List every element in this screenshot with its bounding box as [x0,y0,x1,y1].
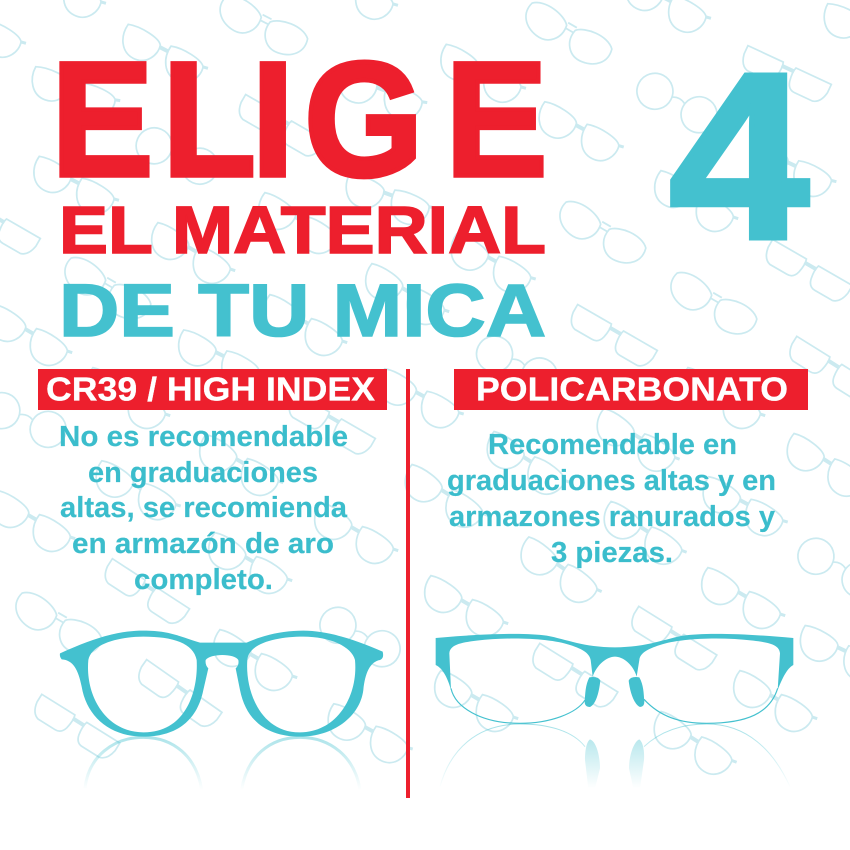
text block: Policarbonato description: armazones ranurados y [449,501,775,533]
step number 4: 4 [669,24,809,289]
panel: CR39 / High Index [38,369,387,790]
text block: Policarbonato description: Recomendable en [488,429,737,461]
frame reflection [85,737,360,790]
text block: Policarbonato description: 3 piezas. [551,537,673,569]
frame reflection [440,724,790,788]
text block: CR39 description: en graduaciones [88,457,318,489]
title [51,28,547,352]
label band: CR39 / HIGH INDEX: CR39 / HIGH INDEX [46,370,375,408]
heading: EL MATERIAL: EL MATERIAL [59,193,546,268]
divider line [406,369,410,798]
text block: CR39 description: en armazón de aro [72,528,334,560]
text block: Policarbonato description [447,429,776,569]
text block: CR39 description: No es recomendable [59,421,348,453]
text block: CR39 description [59,421,348,596]
text block: CR39 description: completo. [134,564,273,596]
icon: semi-rimless glasses [436,634,793,788]
heading: DE TU MICA: DE TU MICA [59,269,546,352]
panel: Policarbonato [436,369,808,788]
text block: CR39 description: altas, se recomienda [60,492,348,524]
thin lower rim [451,688,778,723]
upper frame [436,634,793,690]
full-rim frame [60,631,383,737]
label band: POLICARBONATO: POLICARBONATO [476,370,788,408]
nose pads [585,677,644,707]
icon: full-rim glasses [60,631,383,790]
text block: Policarbonato description: graduaciones altas y en [447,465,776,497]
heading: ELIGE: ELIGE [51,28,547,211]
